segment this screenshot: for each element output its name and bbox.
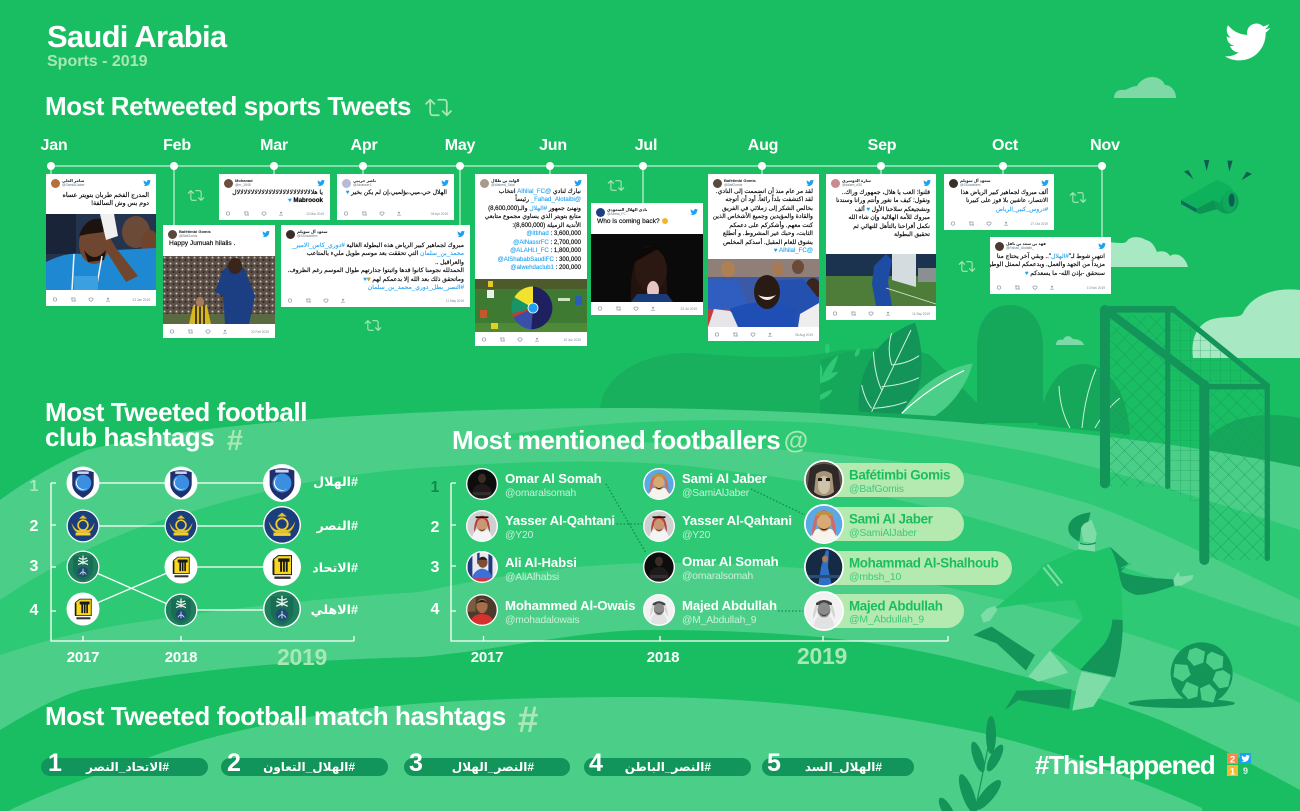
tweet: July — [591, 203, 703, 315]
background hills behind the pitch — [600, 305, 1300, 480]
heading: match hashtags — [45, 699, 538, 740]
icon: whistle — [1181, 160, 1252, 214]
match 5: #الهلال_السد — [805, 760, 882, 774]
heading: footballers: Most mentioned footballers — [452, 425, 780, 455]
tweet: January: المدرج الفخم طربان بتويتر عساه — [62, 192, 149, 199]
match 1: 1 — [48, 749, 62, 777]
tweet: November: انتهى شوط لـ"#الهلال".. وبقي آخر يحتاج منا — [997, 253, 1105, 260]
2018 column: Sami Al Jaber — [682, 471, 767, 486]
tweet: May: سعود آل سويلم — [297, 228, 328, 234]
club logos 2018 — [164, 466, 198, 626]
cloud: top right — [1114, 77, 1176, 98]
tweet: May: وماتحقق ذلك بعد الله إلا بدعمكم لهم ♥♥ — [363, 276, 464, 283]
tweet: May: 11 May 2019 — [446, 298, 464, 302]
tweet: November: فهد بن سعد بن نافل — [1006, 240, 1046, 246]
icon: retweet heading — [426, 100, 451, 115]
tweet: May: #النصر_بطل_دوري_محمد_بن_سلمان — [368, 284, 464, 291]
timeline: Sep — [868, 137, 897, 154]
subtitle: Sports - 2019 — [47, 53, 148, 70]
chart: most mentioned footballers: 2019 — [797, 643, 847, 669]
tweet: April — [337, 174, 454, 220]
heading: match hashtags: Most Tweeted football match hashtags — [45, 701, 506, 731]
2019 column highlighted: @BafGomis — [849, 484, 904, 495]
tweet: September: نكمل أفراحنا بالتأهل للنهائي ثم — [853, 223, 930, 230]
timeline: Mar — [260, 137, 288, 154]
2017 column: @Y20 — [505, 530, 534, 541]
2019 column highlighted: Majed Abdullah — [849, 598, 943, 614]
tweet: October: 27 Oct 2019 — [1031, 222, 1048, 226]
tweet: January — [46, 174, 156, 306]
tweet: October — [944, 174, 1054, 230]
tweet: June with pie chart: @AlShababSaudiFC : 300,000 — [498, 256, 581, 263]
tweet: June with pie chart: نبارك لنادي @Alhilal_FC انتخاب — [499, 188, 581, 195]
chart: most mentioned footballers: 2017 — [471, 649, 503, 666]
tweet: June with pie chart: @ittihad : 3,600,000 — [526, 230, 581, 237]
match 2 — [221, 749, 388, 777]
cloud: large behind goal — [1192, 289, 1300, 358]
hashtag labels: #الهلال — [313, 475, 358, 489]
tweet: September: 11 Sep 2019 — [912, 312, 930, 316]
pitch bands — [0, 408, 1300, 811]
tweet: May: والعراقيل .. — [435, 259, 464, 266]
tweet: September: سارة الدوسري — [842, 178, 871, 182]
tweet: August: لقد مر عام منذ أن انضممت إلى النادي. — [716, 188, 813, 195]
tweet: September: مبروك للأمة الهلالية وإن شاء الله — [848, 214, 930, 221]
2017 column: Omar Al Somah — [505, 471, 602, 486]
tweet: August: Bafétimbi Gomis — [724, 178, 756, 182]
tweet: August — [708, 174, 819, 341]
chart: most mentioned footballers: 4 — [431, 601, 440, 618]
tweet: August: بخالص الشكر إلى زملائي في الفريق — [722, 205, 813, 212]
tweet: September: تحقيق البطولة — [894, 231, 930, 238]
2018 column: @omaralsomah — [682, 571, 753, 582]
2018 column: Yasser Al-Qahtani — [682, 513, 792, 528]
timeline: Jul — [635, 137, 657, 154]
tweet: July: Who is coming back? — [597, 218, 660, 225]
2017 column: @mohadalowais — [505, 615, 579, 626]
tweet: February: @BafGomis — [179, 234, 197, 238]
match 5 — [762, 749, 914, 777]
tweet: September: ونقول: كيف ما نغور وأنتم ورانا وسندنا — [836, 197, 930, 204]
tweet: November: 10 Nov 2019 — [1087, 286, 1105, 290]
tweet: August: الثابت، وحبك غير المشروط. و أتطلع — [723, 230, 813, 237]
tweet: October: سعود آل سويلم — [960, 178, 991, 182]
tweet: July: @Alhilal_FC — [607, 212, 626, 216]
2019 column highlighted: @M_Abdullah_9 — [849, 614, 924, 626]
chart: club hashtag ranking: 4 — [30, 602, 39, 619]
timeline: Apr — [351, 137, 377, 154]
tweet: March: Mabroook ♥ — [288, 197, 323, 204]
heading: club hashtags: Most Tweeted football — [45, 397, 307, 427]
2018 column — [643, 468, 792, 626]
heading: club hashtags: # — [227, 425, 243, 457]
match 1 — [41, 749, 208, 777]
timeline: Oct — [992, 137, 1019, 154]
tweet: March: @m_1945 — [235, 183, 251, 187]
chart: club hashtag ranking: 2017 — [67, 649, 99, 666]
tweet: June with pie chart: متابع بتويتر الذي يساوي مجموع متابعي — [485, 213, 581, 220]
tweet: September: @salam_d30 — [842, 183, 862, 187]
chart: most mentioned footballers: 2 — [431, 519, 440, 536]
match 4: 4 — [589, 749, 603, 777]
match 3: #النصر_الهلال — [452, 760, 534, 774]
cloud: small — [1056, 336, 1084, 345]
tweet: January: دوم بس وش السالفة! — [91, 200, 149, 207]
hashtag labels — [311, 475, 358, 617]
2019 column highlighted: @mbsh_10 — [849, 572, 901, 583]
match 2: #الهلال_التعاون — [263, 760, 355, 775]
soccer ball — [1128, 642, 1235, 708]
timeline: Jun — [539, 137, 567, 154]
timeline — [41, 137, 1120, 237]
2019 column highlighted: Sami Al Jaber — [849, 512, 934, 526]
timeline: Nov — [1090, 137, 1120, 154]
tweet: June with pie chart: @ALAHLI_FC : 1,800,000 — [510, 247, 581, 254]
tweet: September — [826, 174, 936, 320]
tweet: August: والقادة والمؤيدين وجميع الأشخاص الذين — [713, 213, 813, 220]
timeline: May — [445, 137, 476, 154]
chart: club hashtag ranking: 1 — [30, 478, 39, 495]
tweet: August: @BafGomis — [724, 183, 742, 187]
match 3: 3 — [409, 749, 423, 777]
tweet: November: @Fahad_Alotaibi_ — [1006, 246, 1034, 250]
chart: club hashtag ranking: 2019 — [277, 644, 327, 670]
heading: club hashtags — [45, 397, 307, 457]
2017 column: @omaralsomah — [505, 488, 576, 499]
tweet: November: سنحقق -بإذن الله- ما يسعدكم ♥ — [1025, 270, 1105, 277]
match hashtag pills — [41, 749, 914, 777]
tweet: September: ونشجيعكم سلاحنا الأول ♥ ألف — [855, 206, 930, 213]
match 4: #النصر_الباطن — [625, 760, 711, 774]
chart: most mentioned footballers: 1 — [431, 479, 440, 496]
tweet: November: مزيداً من الجهد والعمل. وبدعمكم لممثل الوطن — [990, 261, 1105, 268]
chart: club hashtag ranking: 3 — [30, 558, 39, 575]
tweet: March: يا هلالالالالالالالالالالالالالالالالالالالالالال — [232, 189, 323, 196]
chart: club hashtag ranking: 2 — [30, 518, 39, 535]
2017 column: Yasser Al-Qahtani — [505, 513, 615, 528]
logo: this happened 2019: 9 — [1243, 766, 1248, 776]
tweet: January: @SamiAlJaber — [62, 183, 85, 187]
tweet: April: ناصر حريبي — [353, 178, 376, 182]
tweet: October: @SSuwailem — [960, 183, 980, 187]
tweet: May: @SSuwailem — [297, 234, 317, 238]
club logos 2017 — [66, 466, 100, 626]
tweet: August: لقد اكتشفت بلداً رائعاً. أود أن أتوجه — [725, 196, 813, 203]
timeline: Jan — [41, 137, 67, 154]
chart: club hashtag ranking: 2018 — [165, 649, 197, 666]
tweet: April: @Alnasser1 — [353, 183, 372, 187]
tweet: June with pie chart: @Fahad_Alotaibi_ رئيساً — [515, 196, 581, 203]
2017 column — [466, 468, 635, 626]
heading: match hashtags: # — [518, 699, 538, 740]
tweet: September: قلنوا: العب يا هلال، جمهورك وراك.. — [842, 189, 930, 196]
tweet: May: مبروك لجماهير كبير الرياض هذه البطولة الغالية #دوري_كاس_الامير_ — [292, 242, 464, 249]
cloud: beside last tweet — [1107, 237, 1188, 267]
tweet: June with pie chart: 10 Jun 2019 — [563, 338, 581, 342]
tweet: March: 12 Mar 2019 — [306, 212, 324, 216]
tweet: January: سامر العلي — [62, 178, 84, 182]
2018 column: Omar Al Somah — [682, 554, 779, 569]
club logos 2019 — [263, 464, 301, 628]
tweet: May — [281, 225, 470, 307]
tweet: January: 23 Jan 2019 — [132, 298, 150, 302]
tweet: March — [219, 174, 330, 220]
player — [973, 512, 1193, 711]
tweet: August: 08 Aug 2019 — [795, 332, 813, 336]
tweet: July: نادي الهلال السعودي — [607, 206, 647, 212]
chart: most mentioned footballers: 3 — [431, 559, 440, 576]
match 3 — [404, 749, 570, 777]
heading: most retweeted sports tweets: Most Retweeted sports Tweets — [45, 91, 411, 121]
tweet: June with pie chart: الوليد بن طلال — [491, 178, 519, 182]
tweet: June with pie chart: @AlNassrFC : 2,700,000 — [513, 239, 581, 246]
chart: club hashtag ranking — [30, 464, 358, 670]
tweet: April: الهلال حي،ميي،بؤلميي،إن لم يكن بخير ♥ — [346, 189, 447, 196]
tweet: June with pie chart: @Waleed_Talal — [491, 183, 515, 187]
tweet: February: Bafétimbi Gomis — [179, 228, 211, 234]
tweet: May: الحمدلله نجومنا كانوا قدها واثبتوا جدارتهم طوال الموسم رغم الظروف. — [288, 267, 464, 274]
pie chart image — [475, 279, 587, 332]
tweet: August: بشوق للعام المقبل. أسدكم المخلص — [723, 239, 813, 246]
tweet: August: @Alhilal_FC ♥ — [774, 247, 813, 254]
tweet: March: Mohanad — [235, 178, 253, 182]
2019 column highlighted: @SamiAlJaber — [849, 528, 917, 539]
tweet: November — [990, 237, 1111, 294]
timeline: Feb — [163, 137, 191, 154]
icon: twitter bird — [1225, 24, 1270, 60]
2017 column: @AliAlhabsi — [505, 572, 559, 583]
2019 column highlighted: Mohammad Al-Shalhoub — [849, 556, 999, 570]
tweet: July: 23 Jul 2019 — [681, 306, 697, 310]
timeline: Aug — [748, 137, 778, 154]
hashtag labels: #الاتحاد — [312, 561, 358, 575]
match 2: 2 — [227, 749, 241, 777]
match 5: 5 — [767, 749, 781, 777]
hashtag labels: #النصر — [316, 519, 358, 533]
tweet: October: #دروس_كبير_الرياض — [996, 207, 1048, 213]
tweet: October: ألف مبروك لجماهير كبير الرياض هذا — [961, 190, 1048, 196]
2017 column: Ali Al-Habsi — [505, 555, 577, 570]
heading: club hashtags: club hashtags — [45, 422, 214, 452]
tweet: February: 22 Feb 2019 — [251, 330, 269, 334]
tweet: February — [163, 225, 275, 338]
leaves near goal — [820, 323, 973, 416]
2019 column highlighted: Bafétimbi Gomis — [849, 468, 950, 482]
tweet: August: كنت معهم. وأشكركم على دعمكم — [729, 222, 813, 229]
hashtag: ThisHappened: #ThisHappened — [1035, 750, 1215, 780]
tweet: February: Happy Jumuah hilalis . — [169, 240, 235, 247]
title: Saudi Arabia — [47, 19, 228, 54]
logo: this happened 2019: 2 — [1230, 754, 1235, 766]
2018 column: @M_Abdullah_9 — [682, 615, 757, 626]
tweet: June with pie chart: ونهنئ جمهور #الهلال والـ(8,600,000) — [488, 205, 581, 212]
goal net and frame — [1105, 309, 1267, 560]
tweet: October: الانتصار، عاشين بلا فوز على كبيرنا — [966, 198, 1048, 204]
tweet: June with pie chart: الأندية الزميلة (8,600,000): — [512, 222, 581, 229]
chart: most mentioned footballers — [431, 460, 1012, 669]
logo: this happened 2019: 1 — [1230, 766, 1236, 778]
2018 column: @SamiAlJaber — [682, 488, 750, 499]
2018 column: Majed Abdullah — [682, 598, 777, 613]
2018 column: @Y20 — [682, 530, 711, 541]
2019 column highlighted — [804, 460, 1012, 631]
chart: most mentioned footballers: 2018 — [647, 649, 679, 666]
match 1: #الاتحاد_النصر — [85, 760, 169, 774]
heading: footballers: @ — [784, 427, 808, 455]
tweet: April: 06 Apr 2019 — [431, 212, 448, 216]
tweet: May: محمد_بن_سلمان التي تحققت بعد موسم طويل مليء بالمتاعب — [307, 250, 464, 257]
tweet: June with pie chart — [475, 174, 587, 346]
hashtag labels: #الاهلي — [311, 603, 358, 617]
tweet: June with pie chart: @alwehdaclub1 : 200,000 — [510, 264, 581, 271]
plant — [936, 716, 1006, 811]
retweet icons between tweets — [188, 181, 1086, 330]
2017 column: Mohammed Al-Owais — [505, 598, 635, 613]
match 4 — [584, 749, 751, 777]
logo: this happened 2019 — [1227, 753, 1251, 778]
